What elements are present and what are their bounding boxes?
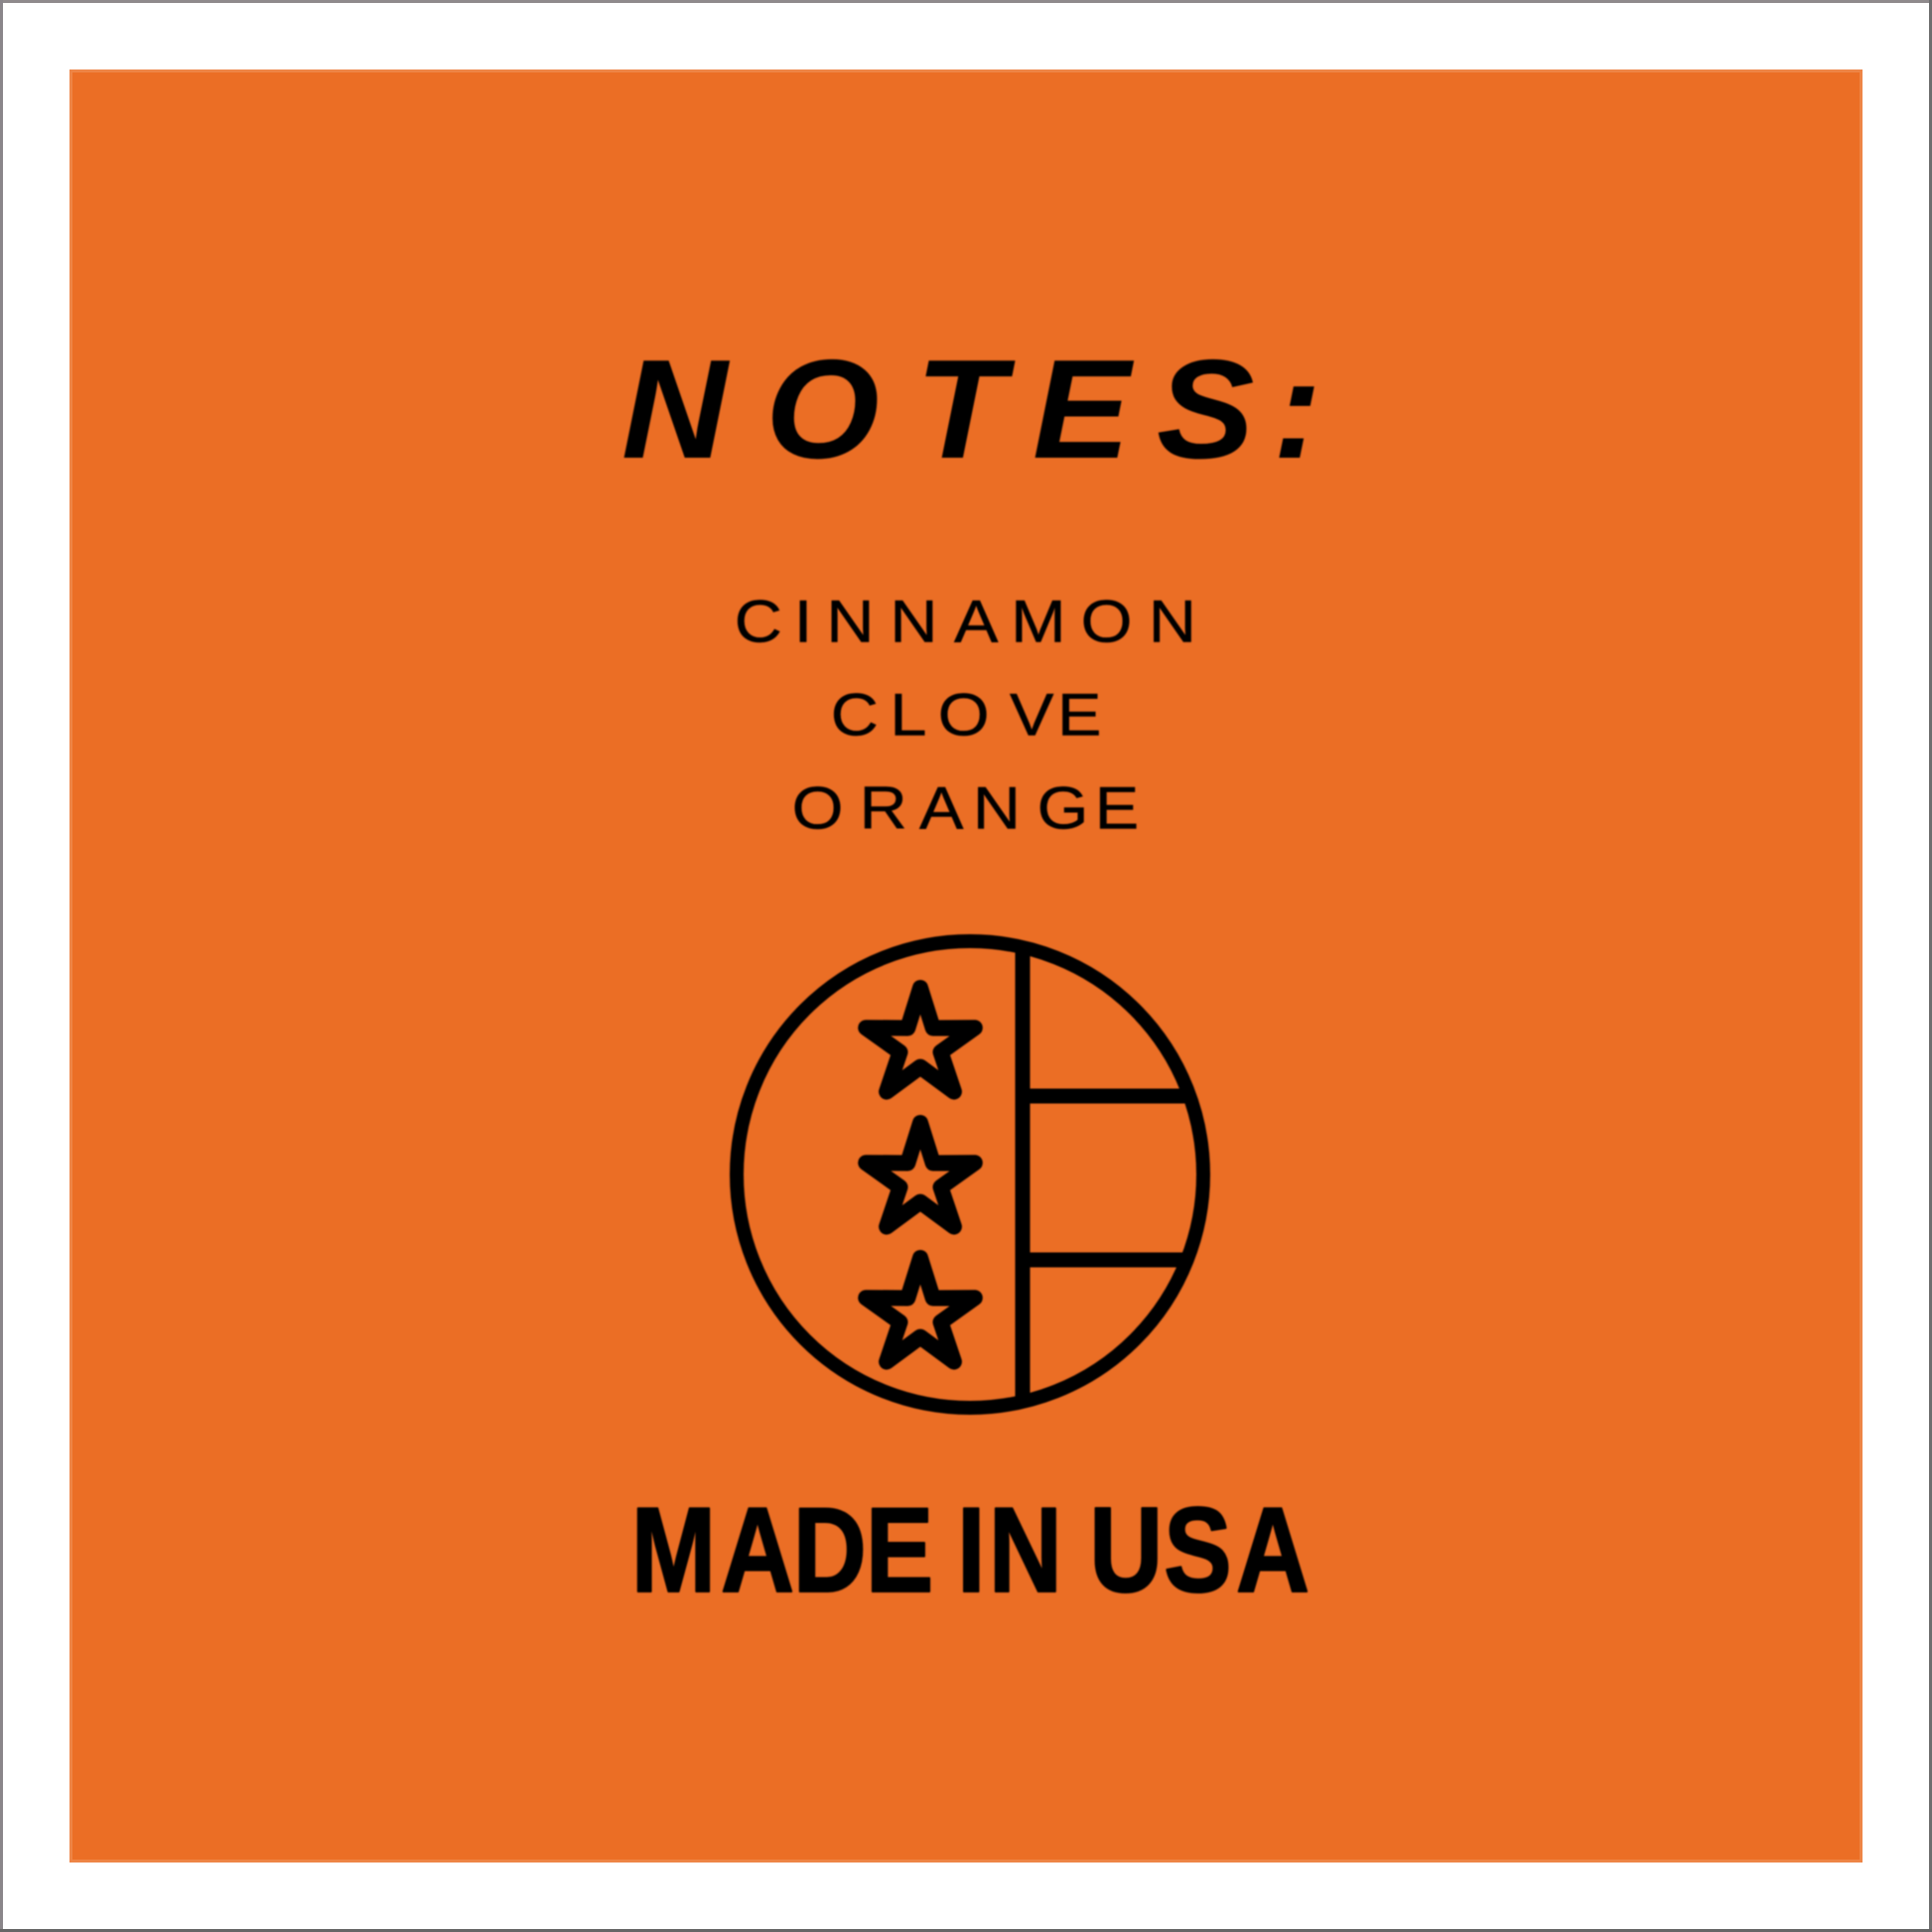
heading: notes: NOTES: xyxy=(621,331,1321,487)
icon: round american flag xyxy=(737,941,1203,1408)
label: made in usa: MADE IN USA xyxy=(631,1482,1310,1617)
text block: scent notes list xyxy=(735,589,1196,842)
note: orange: ORANGE xyxy=(792,775,1139,842)
icon: star top xyxy=(866,988,975,1092)
note: clove: CLOVE xyxy=(831,682,1101,749)
icon: star bottom xyxy=(866,1258,975,1362)
icon: star middle xyxy=(866,1123,975,1227)
note: cinnamon: CINNAMON xyxy=(735,589,1196,655)
